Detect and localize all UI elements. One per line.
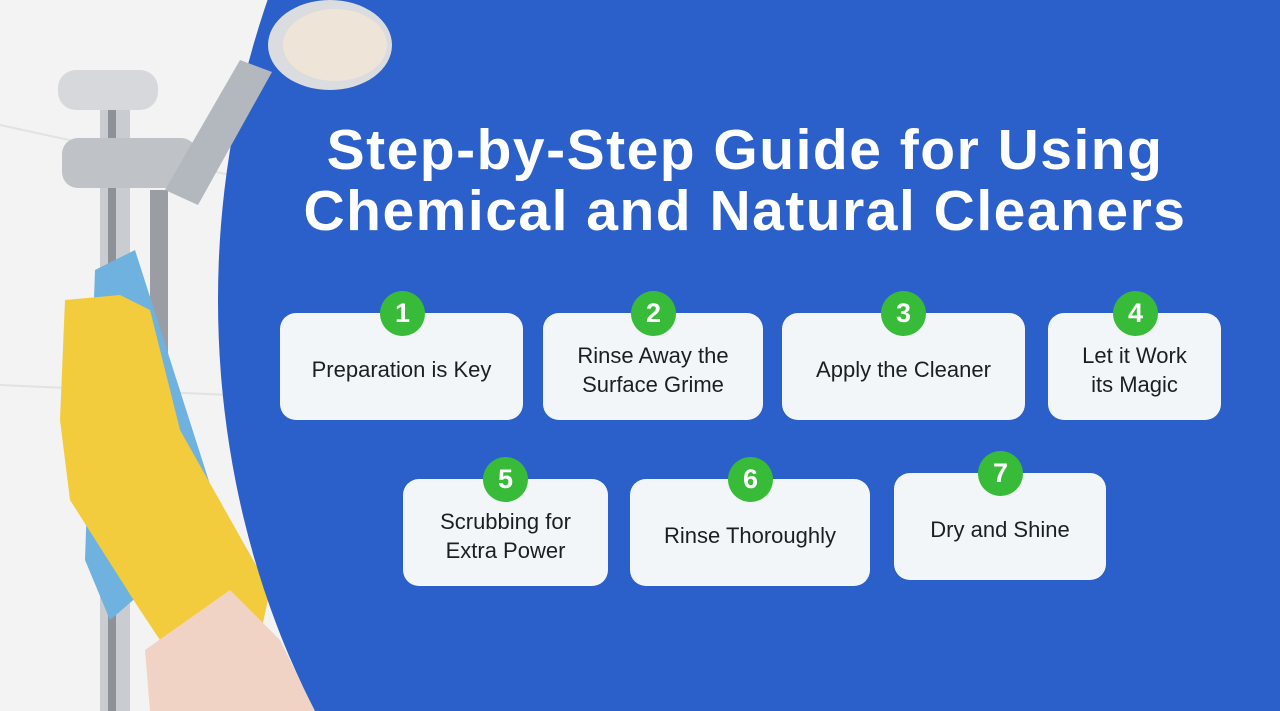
title: Step-by-Step Guide for Using [327, 118, 1163, 182]
step 2 card: Surface Grime [582, 372, 724, 396]
badge 3: 3 [896, 298, 911, 328]
title [304, 118, 1186, 243]
badge 1: 1 [395, 298, 410, 328]
badge 7 [978, 451, 1023, 496]
step 4 card [1048, 313, 1221, 420]
step 2 card [543, 313, 763, 420]
title: Chemical and Natural Cleaners [304, 179, 1186, 243]
step 2 card: Rinse Away the [577, 342, 729, 368]
badge 2: 2 [646, 298, 661, 328]
step 4 card: Let it Work [1082, 342, 1187, 368]
badge 6 [728, 457, 773, 502]
step 4 card: its Magic [1091, 372, 1178, 396]
step 6 card [630, 479, 870, 586]
badge 6: 6 [743, 464, 758, 494]
badge 4 [1113, 291, 1158, 336]
step 1 card [280, 313, 523, 420]
badge 1 [380, 291, 425, 336]
step 5 card: Scrubbing for [440, 508, 571, 534]
step 5 card: Extra Power [446, 538, 565, 562]
shower head [165, 0, 392, 205]
step 6 card: Rinse Thoroughly [664, 523, 836, 548]
badge 2 [631, 291, 676, 336]
badge 3 [881, 291, 926, 336]
badge 5 [483, 457, 528, 502]
badge 7: 7 [993, 458, 1008, 488]
step 7 card: Dry and Shine [930, 517, 1070, 542]
step 7 card [894, 473, 1106, 580]
step 5 card [403, 479, 608, 586]
badge 4: 4 [1128, 298, 1143, 328]
badge 5: 5 [498, 464, 513, 494]
step 3 card [782, 313, 1025, 420]
step 1 card: Preparation is Key [312, 357, 491, 382]
step 3 card: Apply the Cleaner [816, 357, 991, 382]
